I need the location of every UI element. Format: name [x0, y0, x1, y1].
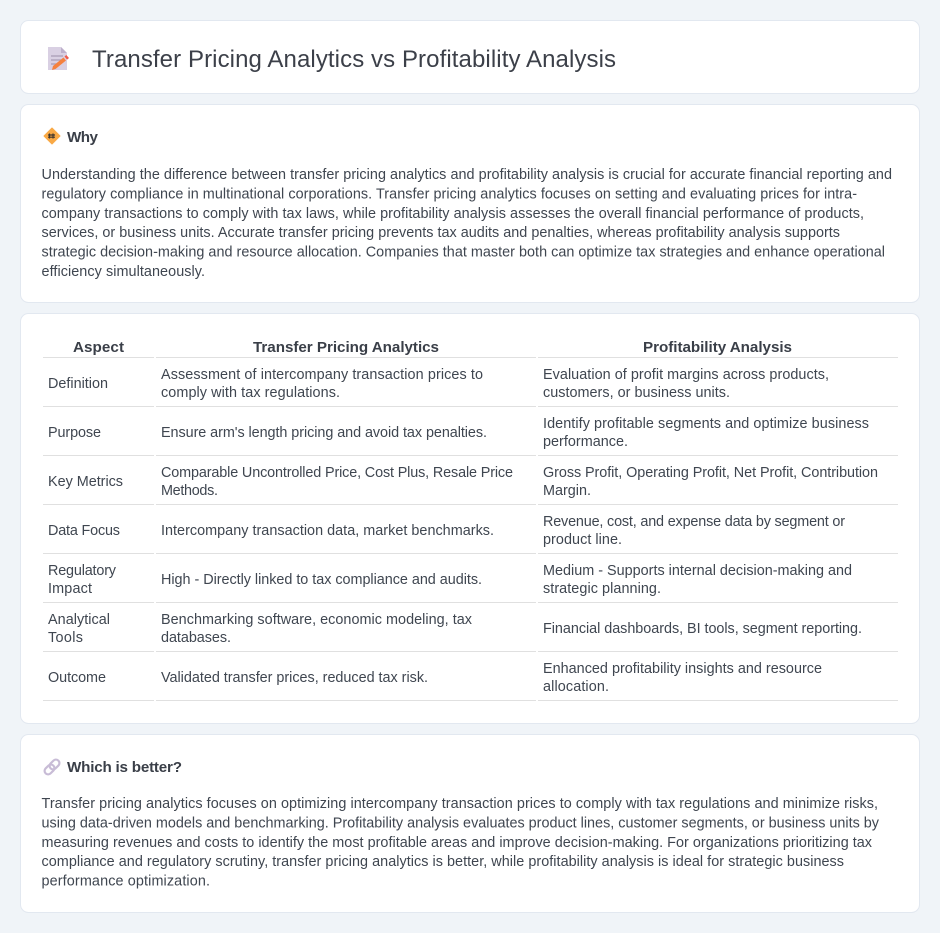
- text block: why: efficiency simultaneously.: [42, 264, 205, 280]
- row: definition: customers, or business units.: [543, 385, 730, 401]
- row: outcome: Enhanced profitability insights and resource: [543, 661, 822, 677]
- row: regulatory impact: Regulatory: [48, 563, 117, 579]
- row: regulatory impact: Impact: [48, 581, 92, 597]
- row: data focus: product line.: [543, 532, 622, 548]
- row: analytical tools: Benchmarking software, economic modeling, tax: [161, 612, 473, 628]
- panel: comparison table: [20, 314, 920, 724]
- panel: why: [20, 104, 920, 302]
- row: key metrics: Gross Profit, Operating Profit, Net Profit, Contribution: [543, 465, 878, 481]
- icon: chain link: [43, 758, 61, 776]
- heading: which is better: Which is better?: [67, 759, 182, 776]
- row: purpose: Purpose: [48, 425, 101, 441]
- table header row: [43, 339, 898, 358]
- row: definition: Assessment of intercompany transaction prices to: [161, 367, 483, 383]
- row: key metrics: Margin.: [543, 483, 591, 499]
- row: purpose: Ensure arm's length pricing and avoid tax penalties.: [161, 425, 487, 441]
- row: purpose: performance.: [543, 434, 628, 450]
- row: key metrics: Comparable Uncontrolled Price, Cost Plus, Resale Price: [161, 465, 513, 481]
- row: outcome: allocation.: [543, 679, 609, 695]
- text block: why: company transactions to comply with tax laws, while profitability analysis assesses the overall financial performance of products,: [42, 206, 864, 222]
- title: Transfer Pricing Analytics vs Profitability Analysis: [92, 46, 616, 73]
- text block: which is better: performance optimization.: [42, 874, 210, 890]
- row: definition: Definition: [48, 376, 108, 392]
- row: definition: [43, 367, 898, 407]
- row: purpose: [43, 416, 898, 456]
- table header row: Profitability Analysis: [643, 339, 792, 356]
- row: key metrics: Methods.: [161, 483, 218, 499]
- text block: which is better: compliance and regulatory scrutiny, transfer pricing analytics is better, while profitability analysis is ideal for strategic business: [42, 854, 844, 870]
- text block: why: regulatory compliance in multinational corporations. Transfer pricing analytics focuses on setting and evaluating prices for intra-: [42, 186, 857, 202]
- row: analytical tools: Financial dashboards, BI tools, segment reporting.: [543, 621, 862, 637]
- icon: orange diamond: [44, 128, 60, 144]
- row: data focus: Data Focus: [48, 523, 120, 539]
- heading: why: Why: [67, 129, 99, 146]
- row: data focus: [43, 514, 898, 554]
- row: data focus: Revenue, cost, and expense data by segment or: [543, 514, 845, 530]
- row: regulatory impact: [43, 563, 898, 603]
- row: key metrics: [43, 465, 898, 505]
- row: regulatory impact: High - Directly linked to tax compliance and audits.: [161, 572, 482, 588]
- text block: why: strategic decision-making and resource allocation. Companies that master both can optimize tax strategies and enhance operational: [42, 245, 885, 261]
- row: key metrics: Key Metrics: [48, 474, 123, 490]
- table header row: Transfer Pricing Analytics: [253, 339, 439, 356]
- text block: why: services, or business units. Accurate transfer pricing prevents tax audits and penalties, whereas profitability analysis supports: [42, 225, 840, 241]
- row: outcome: Validated transfer prices, reduced tax risk.: [161, 670, 428, 686]
- text block: which is better: [42, 796, 880, 890]
- text block: which is better: Transfer pricing analytics focuses on optimizing intercompany transaction prices to comply with tax regulations and minimize risks,: [42, 796, 878, 812]
- row: definition: Evaluation of profit margins across products,: [543, 367, 829, 383]
- text block: why: Understanding the difference between transfer pricing analytics and profitability analysis is crucial for accurate financial reporting and: [42, 167, 892, 183]
- table header row: Aspect: [73, 339, 124, 356]
- row: analytical tools: Analytical: [48, 612, 110, 628]
- text block: why: [42, 167, 892, 280]
- row: analytical tools: Tools: [48, 630, 83, 646]
- row: purpose: Identify profitable segments and optimize business: [543, 416, 869, 432]
- icon: document with pencil: [48, 47, 69, 70]
- panel: which is better: [20, 734, 920, 912]
- row: regulatory impact: Medium - Supports internal decision-making and: [543, 563, 852, 579]
- text block: which is better: measuring revenues and costs to identify the most profitable areas and improve decision-making. For organizations prioritizing tax: [42, 835, 873, 851]
- row: definition: comply with tax regulations.: [161, 385, 340, 401]
- panel: header: [20, 20, 920, 94]
- row: regulatory impact: strategic planning.: [543, 581, 661, 597]
- row: analytical tools: databases.: [161, 630, 231, 646]
- row: data focus: Intercompany transaction data, market benchmarks.: [161, 523, 494, 539]
- row: outcome: [43, 661, 898, 701]
- row: analytical tools: [43, 612, 898, 652]
- row: outcome: Outcome: [48, 670, 106, 686]
- text block: which is better: using data-driven models and benchmarking. Profitability analysis evaluates product lines, customer segments, or business units by: [42, 815, 880, 831]
